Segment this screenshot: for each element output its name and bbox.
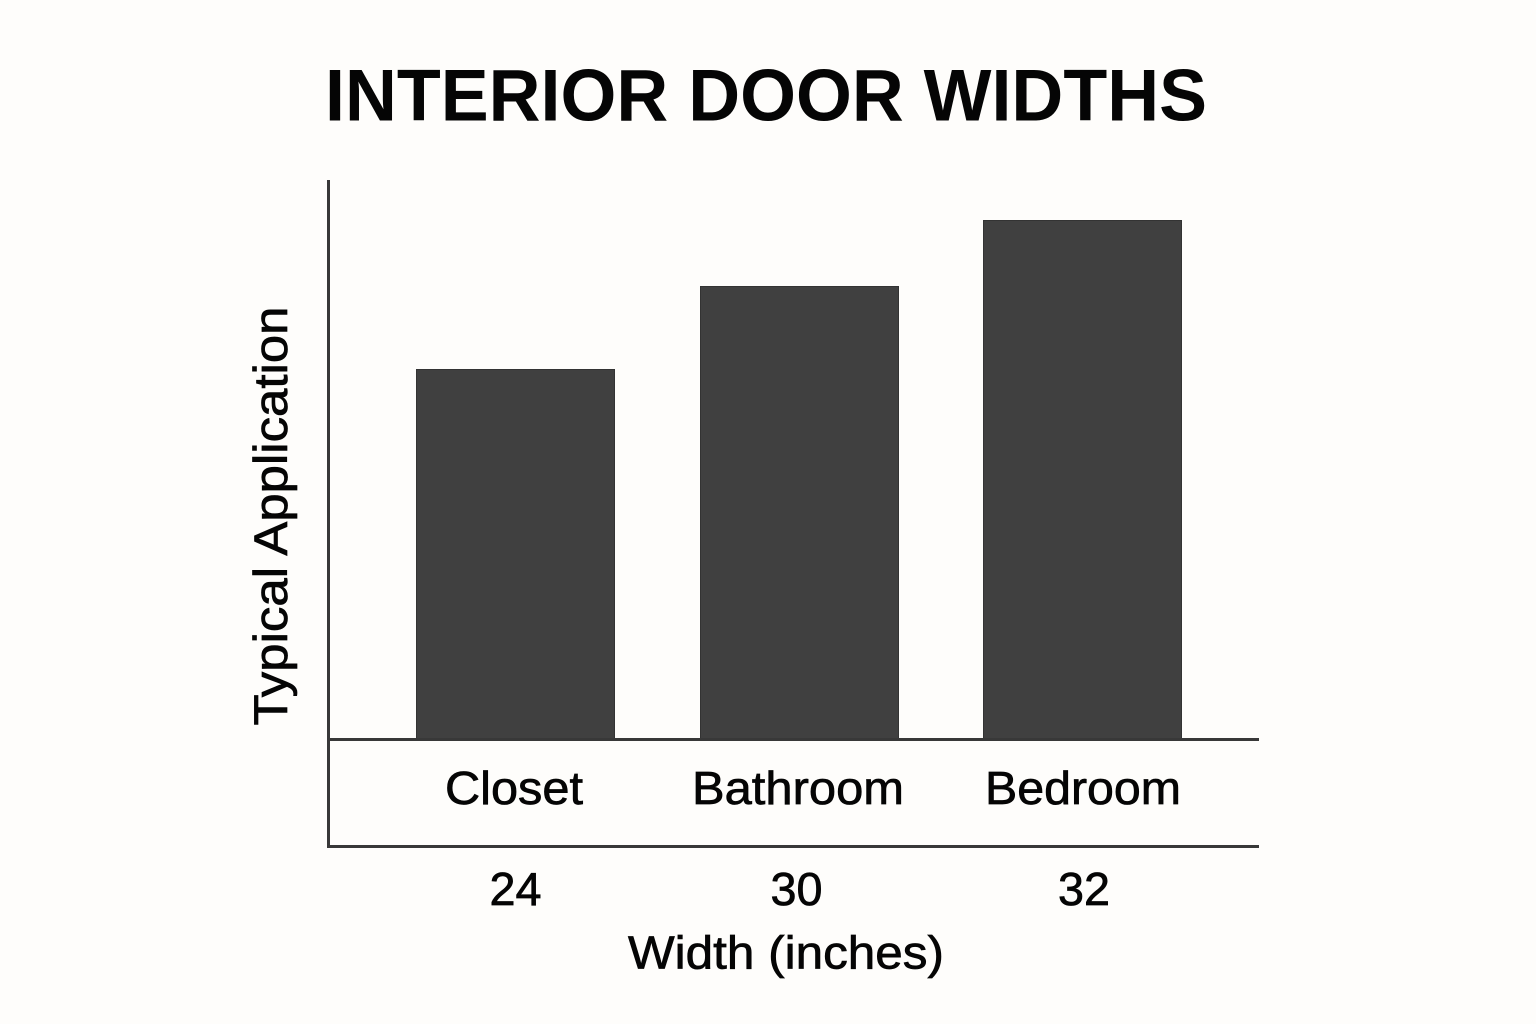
x axis line	[327, 845, 1259, 848]
y axis line	[327, 180, 330, 848]
category label: closet: Closet	[445, 762, 583, 814]
bar: bathroom	[700, 286, 898, 740]
title: INTERIOR DOOR WIDTHS	[325, 56, 1207, 136]
bar: bedroom	[984, 220, 1182, 740]
y axis title: Typical Application	[244, 306, 297, 726]
tick label: 32: 32	[1058, 863, 1110, 915]
category baseline	[329, 738, 1259, 741]
category label: bedroom: Bedroom	[985, 762, 1181, 814]
x axis title: Width (inches)	[628, 926, 944, 978]
bar: closet	[416, 370, 614, 740]
tick label: 30: 30	[770, 863, 822, 915]
bar chart	[244, 180, 1259, 978]
category label: bathroom: Bathroom	[692, 762, 904, 814]
tick label: 24: 24	[490, 863, 542, 915]
